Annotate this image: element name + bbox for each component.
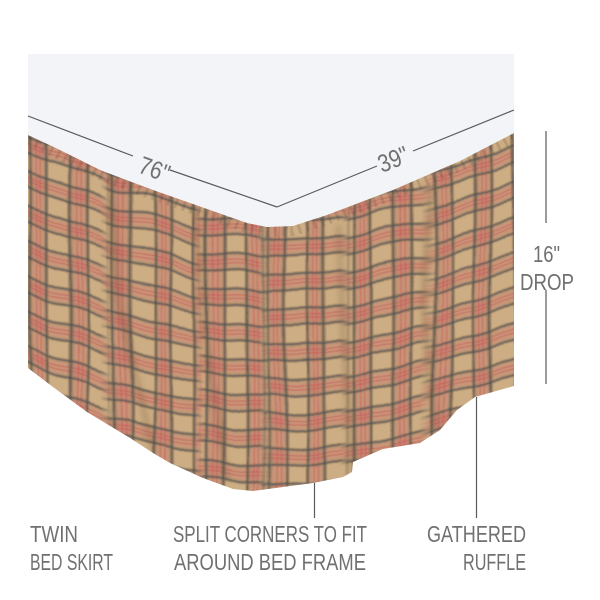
- label: gathered ruffle: [427, 397, 526, 575]
- label: split corners: AROUND BED FRAME: [174, 549, 366, 575]
- dimension: 16 inch drop: 16": [533, 241, 560, 267]
- label: gathered ruffle: RUFFLE: [463, 549, 526, 575]
- label: twin bed skirt: BED SKIRT: [30, 549, 113, 575]
- dimension: 76 inch width: 76": [135, 151, 174, 188]
- dimension: 39 inch depth: [277, 110, 514, 207]
- label: gathered ruffle: GATHERED: [427, 521, 526, 547]
- plaid bed skirt: [28, 133, 514, 491]
- label: twin bed skirt: TWIN: [30, 521, 78, 547]
- label: split corners: SPLIT CORNERS TO FIT: [173, 521, 367, 547]
- bed top mattress panel: [28, 54, 514, 227]
- dimension: 16 inch drop: DROP: [520, 269, 574, 295]
- dimension: 76 inch width: [28, 116, 277, 207]
- label: split corners: [173, 483, 367, 575]
- label: twin bed skirt: [30, 521, 113, 575]
- dimension: 39 inch depth: 39": [374, 141, 413, 179]
- dimension: 16 inch drop: [520, 131, 574, 384]
